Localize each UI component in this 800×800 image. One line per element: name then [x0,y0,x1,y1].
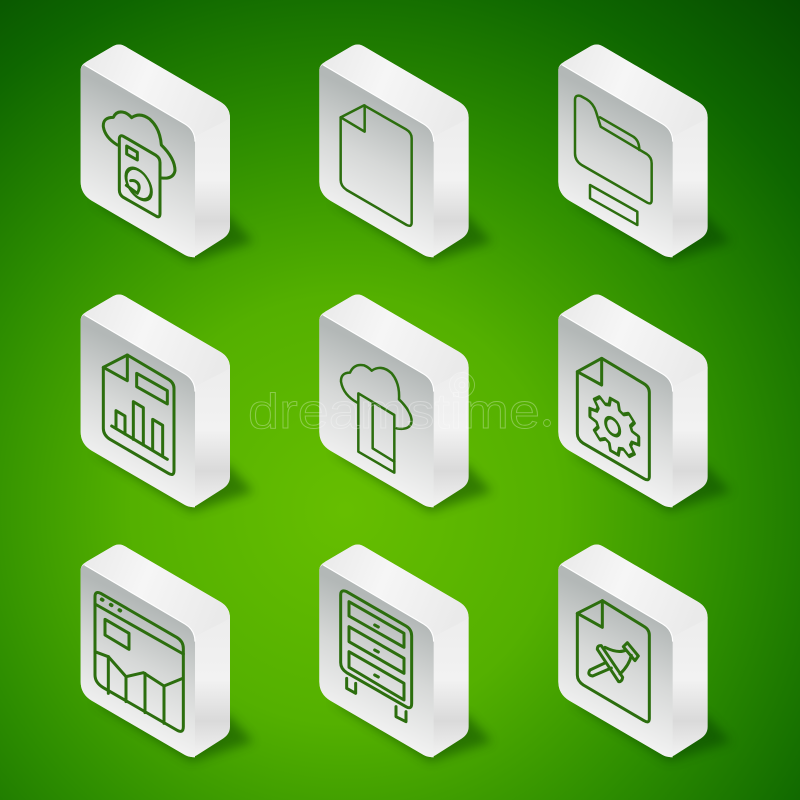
tile: settings document [558,294,731,512]
watermark: dreamstime [248,385,540,439]
tile: chart document [81,294,253,512]
tile: cloud door [319,294,492,512]
tile: cloud speaker [81,44,253,262]
icon: folder [575,96,652,225]
icon: cloud speaker [103,112,175,217]
icon: drawer cabinet [341,591,412,722]
tile: browser chart [81,544,253,762]
tile: pinned document [558,544,731,762]
icon: cloud door [341,365,412,473]
icon: push pin document [577,601,649,722]
icon: gear document [577,358,649,480]
tile: blank document [319,44,492,262]
icon: document [341,105,412,226]
icon: bar chart document [103,355,174,475]
icon: browser window with chart [95,593,183,731]
tile: drawer cabinet [319,544,492,762]
tile: folder [558,44,731,262]
watermark [248,372,550,439]
